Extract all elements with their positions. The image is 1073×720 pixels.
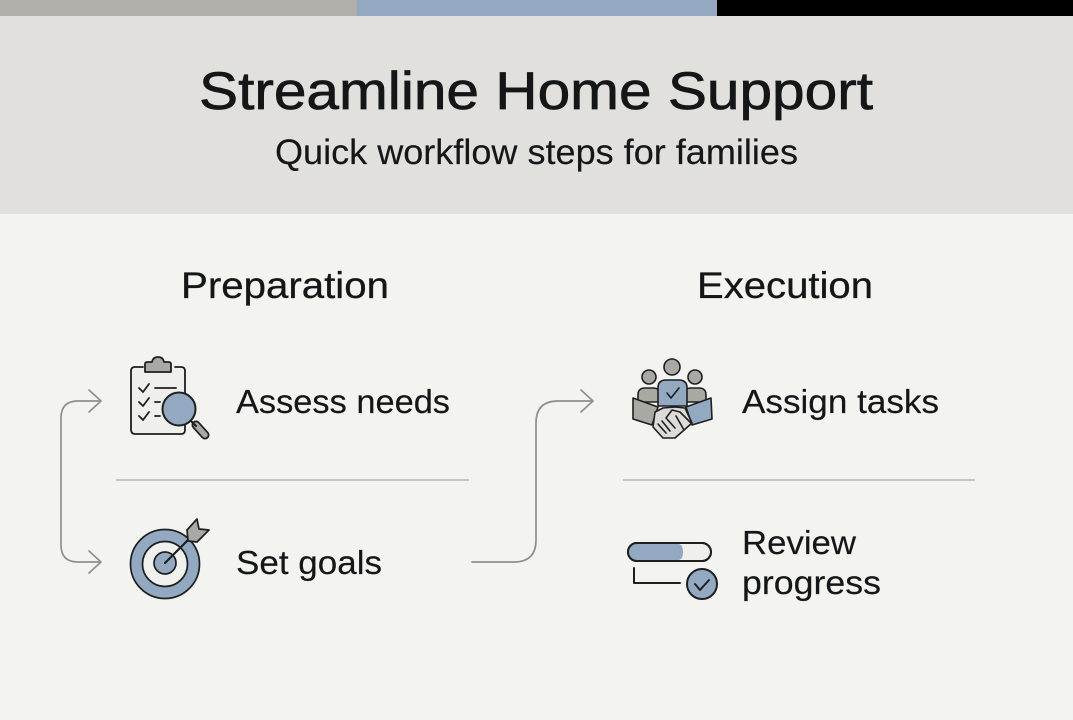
label: Review progress: progress [742, 564, 881, 601]
label: Review progress [742, 524, 881, 601]
icon: target with arrow [130, 519, 209, 598]
header band [0, 16, 1073, 214]
heading: Execution: Execution [697, 265, 873, 306]
top colour bar [0, 0, 1073, 16]
title: Streamline Home Support [199, 62, 873, 121]
subtitle: Quick workflow steps for families [275, 133, 798, 172]
heading: Preparation: Preparation [181, 265, 389, 306]
label: Assess needs: Assess needs [236, 383, 450, 420]
arrow: Set goals to Assign tasks [472, 390, 593, 562]
icon: clipboard with magnifier [131, 357, 205, 435]
label: Review progress: Review [742, 524, 856, 561]
label: Set goals: Set goals [236, 544, 382, 581]
label: Assign tasks: Assign tasks [742, 383, 939, 420]
arrow: loop between Assess needs and Set goals [61, 390, 101, 573]
icon: team and handshake [633, 359, 712, 438]
icon: progress bar with check [628, 543, 717, 599]
